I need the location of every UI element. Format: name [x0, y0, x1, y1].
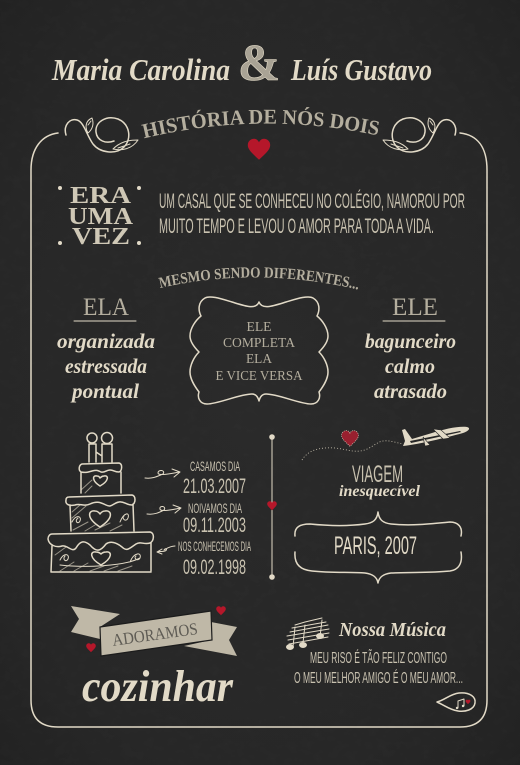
rounded frame: [31, 133, 487, 727]
panel: ela: pontual: [70, 379, 139, 403]
panel: ele completa ela: [190, 297, 328, 404]
heading: história de nós dois: HISTÓRIA DE NÓS DOIS: [141, 107, 379, 138]
heading: história de nós dois: [64, 107, 456, 160]
paris frame: [295, 512, 461, 583]
panel: era uma vez: [58, 183, 465, 250]
cake toppers: [87, 432, 112, 462]
bottom tier: [48, 532, 153, 572]
arrow: casamos: [145, 469, 180, 478]
panel: timeline dates: 09.11.2003: [183, 514, 246, 537]
panel: nossa música: Nossa Música: [338, 619, 446, 641]
panel: timeline dates: NOIVAMOS DIA: [188, 500, 242, 516]
icon: music notes: [286, 618, 329, 650]
arrow: noivamos: [147, 505, 181, 514]
era uma vez badge: ERA: [70, 183, 132, 209]
era uma vez badge: VEZ: [72, 224, 130, 250]
paris frame: PARIS, 2007: [334, 532, 417, 560]
panel: adoramos cozinhar: [71, 606, 237, 711]
banner ribbon: [71, 606, 237, 656]
subheading: mesmo sendo diferentes: MESMO SENDO DIFERENTES...: [158, 267, 358, 290]
panel: timeline dates: [145, 458, 251, 579]
title: couple names: Maria Carolina: [51, 52, 230, 87]
icon: ampersand: &: [238, 35, 280, 92]
text: NOS CONHECEMOS DIA: [178, 538, 251, 554]
panel: ele completa ela: E VICE VERSA: [216, 368, 303, 383]
panel: timeline dates: 21.03.2007: [183, 475, 246, 498]
panel: ele: calmo: [385, 354, 435, 378]
cake hatching: [55, 480, 132, 571]
middle tier: [66, 495, 135, 531]
icon: right flourish: [383, 118, 456, 152]
banner ribbon: ADORAMOS: [111, 619, 199, 650]
icon: left heart: [86, 643, 96, 652]
panel: adoramos cozinhar: cozinhar: [82, 662, 234, 711]
panel: ele: [365, 294, 456, 403]
title: couple names: [51, 35, 432, 92]
panel: ela: organizada: [57, 329, 155, 353]
panel: ela: [57, 294, 155, 403]
panel: timeline dates: 09.02.1998: [183, 556, 246, 579]
panel: ela: estressada: [65, 354, 147, 378]
panel: viagem: VIAGEM: [352, 461, 403, 488]
icon: red heart: [248, 139, 270, 160]
panel: viagem: inesquecível: [339, 483, 421, 500]
era uma vez badge: UMA: [68, 204, 134, 230]
dotted flight path: [302, 441, 403, 460]
panel: timeline dates: CASAMOS DIA: [190, 458, 240, 474]
icon: wedding cake: [48, 432, 153, 572]
icon: airplane: [402, 427, 469, 446]
icon: right heart: [216, 606, 226, 615]
panel: ela: ELA: [83, 294, 129, 321]
icon: left flourish: [65, 118, 138, 152]
icon: music speech bubble: [437, 693, 475, 711]
panel: ele: bagunceiro: [365, 329, 456, 353]
panel: ele: atrasado: [374, 379, 447, 403]
lyrics: [294, 650, 463, 687]
panel: ele completa ela: COMPLETA: [223, 335, 295, 350]
panel: ele: ELE: [392, 294, 438, 321]
top tier: [79, 463, 122, 493]
icon: dotted heart: [342, 431, 358, 446]
timeline line: [267, 434, 277, 580]
era uma vez badge: [58, 183, 141, 250]
panel: ele completa ela: ELE: [246, 319, 272, 334]
panel: viagem: [295, 427, 469, 583]
arrow: nos conhecemos: [157, 546, 175, 554]
panel: ele completa ela: ELA: [246, 351, 272, 366]
intro text: [159, 190, 465, 238]
panel: nossa música: [286, 618, 475, 711]
title: couple names: Luís Gustavo: [290, 52, 432, 87]
